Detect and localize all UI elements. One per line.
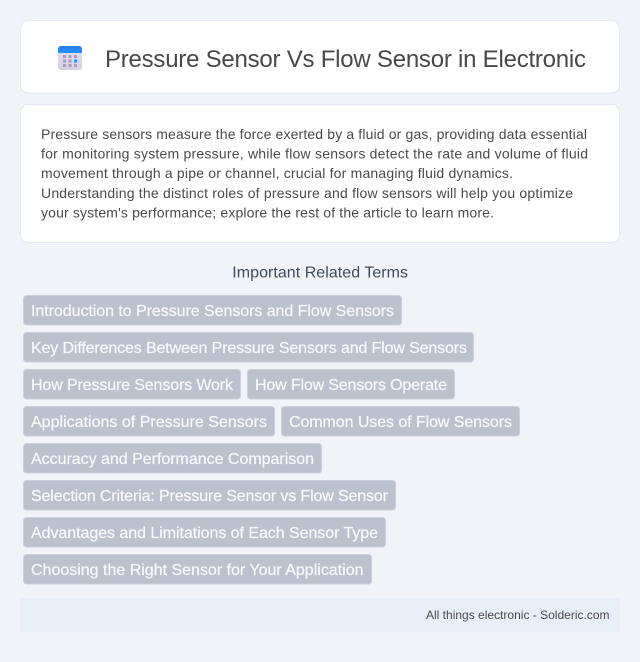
summary paragraph: your system's performance; explore the rest of the article to learn more. <box>41 204 494 220</box>
chip: how pressure sensors work <box>24 370 240 399</box>
chip: how pressure sensors work: How Pressure Sensors Work <box>31 377 234 394</box>
chip: choosing the right sensor: Choosing the Right Sensor for Your Application <box>31 562 364 579</box>
panel: title card <box>20 20 620 93</box>
footer credit: All things electronic - Solderic.com <box>426 608 610 622</box>
chip: introduction <box>24 296 402 325</box>
chip: selection criteria: Selection Criteria: Pressure Sensor vs Flow Sensor <box>31 488 389 505</box>
panel: related term chips <box>24 296 520 584</box>
icon: calendar grid <box>58 46 82 70</box>
chip: advantages and limitations <box>24 518 386 547</box>
summary paragraph: for monitoring system pressure, while flow sensors detect the rate and volume of fluid <box>41 146 588 162</box>
chip: accuracy and performance: Accuracy and Performance Comparison <box>31 451 314 468</box>
chip: how flow sensors operate <box>248 370 454 399</box>
title: Pressure Sensor Vs Flow Sensor in Electronic <box>105 46 586 73</box>
footer bar <box>20 598 620 632</box>
chip: applications of pressure sensors: Applications of Pressure Sensors <box>31 414 267 431</box>
chip: choosing the right sensor <box>24 554 372 584</box>
summary paragraph: movement through a pipe or channel, crucial for managing fluid dynamics. <box>41 165 513 181</box>
chip: advantages and limitations: Advantages and Limitations of Each Sensor Type <box>31 525 378 542</box>
chip: introduction: Introduction to Pressure Sensors and Flow Sensors <box>31 303 394 320</box>
chip: applications of pressure sensors <box>24 406 274 436</box>
chip: accuracy and performance <box>24 444 322 473</box>
summary paragraph: Understanding the distinct roles of pressure and flow sensors will help you optimize <box>41 185 573 201</box>
summary paragraph: Pressure sensors measure the force exerted by a fluid or gas, providing data essential <box>41 126 587 142</box>
chip: key differences: Key Differences Between Pressure Sensors and Flow Sensors <box>31 340 467 357</box>
chip: common uses of flow sensors: Common Uses of Flow Sensors <box>289 414 512 431</box>
chip: key differences <box>24 332 474 362</box>
summary paragraph <box>41 126 588 220</box>
panel: summary card <box>20 104 620 242</box>
chip: how flow sensors operate: How Flow Sensors Operate <box>255 377 447 394</box>
heading: important related terms: Important Related Terms <box>232 265 408 282</box>
chip: selection criteria <box>24 480 396 510</box>
chip: common uses of flow sensors <box>282 406 520 436</box>
